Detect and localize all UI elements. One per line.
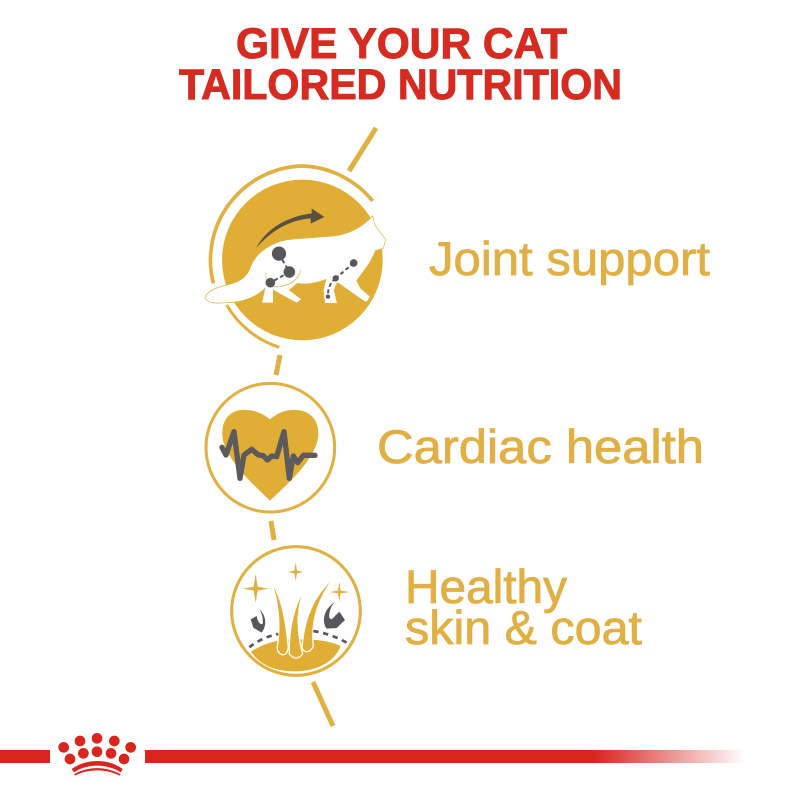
motion arrow xyxy=(256,208,324,248)
label: healthy skin and coat: skin & coat xyxy=(405,601,642,654)
footer bar right xyxy=(145,750,745,763)
footer bar left xyxy=(0,750,50,763)
thigh outline xyxy=(266,270,301,287)
icon: joint support cat xyxy=(205,166,386,347)
label: joint support: Joint support xyxy=(429,232,710,285)
cat silhouette xyxy=(205,216,386,303)
sparkles xyxy=(243,562,349,603)
icon: healthy skin and coat xyxy=(232,547,360,675)
title: TAILORED NUTRITION xyxy=(179,61,622,109)
connector lines xyxy=(271,128,376,726)
label: cardiac health: Cardiac health xyxy=(377,420,704,473)
growth arrows xyxy=(251,602,345,633)
label: healthy skin and coat: Healthy xyxy=(405,560,568,613)
dashed skin line xyxy=(249,631,347,647)
icon: royal crown logo xyxy=(58,733,136,776)
skin mound xyxy=(251,639,341,671)
title: GIVE YOUR CAT xyxy=(236,20,567,68)
joints xyxy=(266,247,357,299)
icon: cardiac health heart xyxy=(206,383,335,512)
hair strands xyxy=(271,576,335,658)
title xyxy=(179,20,622,109)
label: healthy skin and coat xyxy=(405,560,642,654)
